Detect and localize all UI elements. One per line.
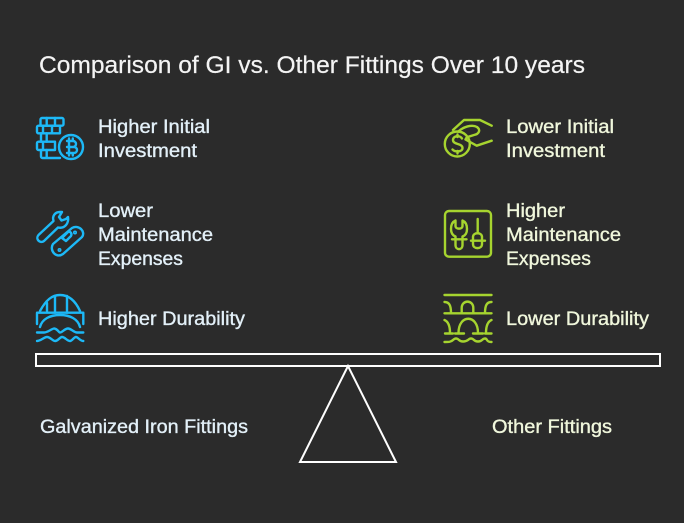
scale beam (36, 354, 660, 366)
text: higher initial investment (98, 117, 210, 162)
label: other fittings: Other Fittings (492, 417, 612, 438)
icon: bricks and bitcoin (37, 118, 83, 159)
icon: stone bridge (444, 295, 492, 342)
text: lower maintenance expenses: Expenses (98, 249, 183, 270)
text: higher durability: Higher Durability (98, 309, 246, 330)
text: lower maintenance expenses: Maintenance (98, 225, 213, 246)
icon: hand holding dollar coin (445, 120, 492, 156)
text: lower durability: Lower Durability (506, 309, 650, 330)
text: lower initial investment: Investment (506, 141, 606, 162)
text: higher maintenance expenses (506, 201, 621, 270)
title: Comparison of GI vs. Other Fittings Over 10 years (39, 52, 585, 79)
text: higher maintenance expenses: Higher (506, 201, 566, 222)
text: lower initial investment: Lower Initial (506, 117, 614, 138)
text: lower maintenance expenses (98, 201, 213, 270)
text: higher maintenance expenses: Expenses (506, 249, 591, 270)
text: lower initial investment (506, 117, 614, 162)
text: higher initial investment: Higher Initial (98, 117, 210, 138)
text: lower maintenance expenses: Lower (98, 201, 154, 222)
icon: arched bridge over water (37, 295, 83, 341)
text: higher initial investment: Investment (98, 141, 198, 162)
text: higher maintenance expenses: Maintenance (506, 225, 621, 246)
icon: wrench and pocket tool (37, 212, 83, 255)
scale fulcrum (300, 366, 396, 462)
icon: tool panel (445, 211, 491, 257)
label: galvanized iron fittings: Galvanized Iron Fittings (40, 417, 248, 438)
